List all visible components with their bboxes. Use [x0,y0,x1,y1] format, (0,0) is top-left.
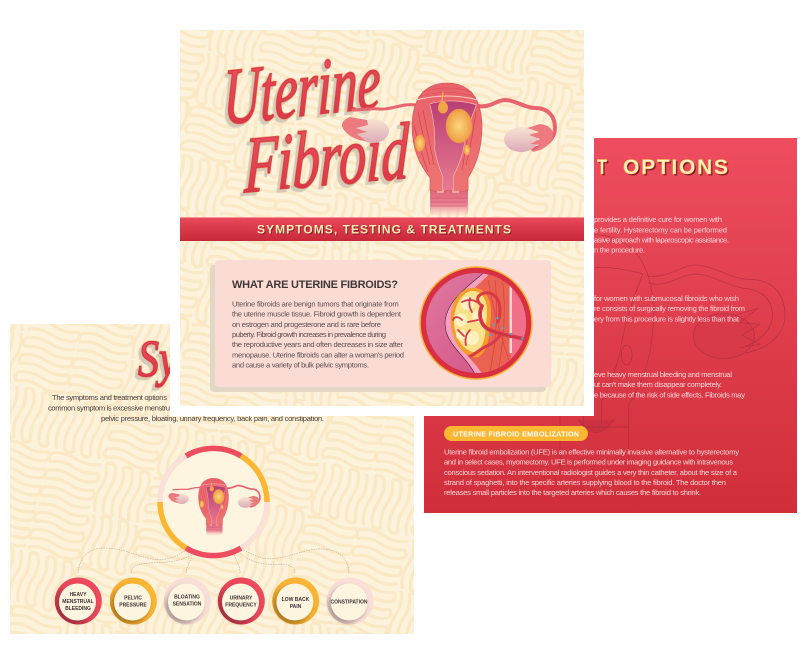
text block: medication: ut can't make them disappear completely. [594,380,722,389]
symptom: pelvic pressure [110,578,157,624]
panel: treatment options [424,138,797,513]
text block: definition: menopause. Uterine fibroids can alter a woman's period [232,350,404,360]
text block: definition: puberty. Fibroid growth increases in prevalence during [232,330,386,339]
heading: options: T [597,156,607,179]
symptom: urinary frequency [218,578,265,624]
symptom: constipation: CONSTIPATION [330,599,368,605]
central circle with uterus [160,448,267,556]
symptom: pelvic pressure: PELVIC [124,596,142,602]
text block: hysterectomy [594,215,729,254]
text block: myomectomy: for women with submucosal fibroids who wish [594,294,739,303]
heading: what are uterine fibroids: WHAT ARE UTERINE FIBROIDS? [232,279,398,291]
text block: definition: the reproductive years and often decreases in size after [232,340,403,349]
symptom: heavy menstrual bleeding [55,578,102,624]
dashed connectors [78,548,349,573]
symptom: bloating sensation: SENSATION [173,602,202,608]
title: uterine fibroid: Uterine [223,37,381,142]
text block: embolization: releases small particles into the targeted arteries which causes the fibroid to shrink. [444,488,701,497]
text block: embolization: and in select cases, myomectomy. UFE is performed under imaging guidance with intravenous [444,458,733,466]
text block: symptoms intro [48,393,324,423]
text block: definition: on estrogen and progesterone and is rare before [232,320,381,329]
text block: hysterectomy: asive approach with laparoscopic assistance. [594,236,729,244]
panel: what are uterine fibroids (main cover) [170,20,594,416]
symptom: low back pain [272,578,319,624]
symptom: heavy menstrual bleeding: BLEEDING [65,606,91,612]
symptom: urinary frequency: URINARY [230,596,253,602]
text block: hysterectomy: provides a definitive cure for women with [594,215,722,224]
text block: hysterectomy: n the procedure. [594,246,645,254]
text block: definition: Uterine fibroids are benign tumors that originate from [232,300,399,308]
text block: symptoms intro: common symptom is excessive menstru [48,404,170,412]
text block: embolization: conscious sedation. An interventional radiologist guides a very thin catheter, about the size of a [444,468,738,477]
text block: medication: eve heavy menstrual bleeding and menstrual [594,370,732,379]
illustration: uterus [342,83,555,217]
title: uterine fibroid [223,37,410,210]
text block: embolization: strand of spaghetti, into the specific arteries supplying blood to the fibroid. The doctor then [444,478,726,487]
heading: options: T [598,158,609,180]
heading: symptoms: Symptoms [138,331,308,388]
symptom: bloating sensation: BLOATING [174,594,200,600]
banner: symptoms, testing and treatments [180,217,584,241]
heading: options: OPTIONS [624,158,730,180]
icon: small uterus [168,478,260,536]
symptom: low back pain: PAIN [290,604,302,610]
symptom: heavy menstrual bleeding: HEAVY [70,592,87,598]
text block: definition: the uterine muscle tissue. Fibroid growth is dependent [232,310,402,319]
banner: symptoms, testing and treatments: SYMPTOMS, TESTING & TREATMENTS [257,222,511,236]
banner: symptoms, testing and treatments: SYMPTOMS, TESTING & TREATMENTS [258,224,512,238]
symptom: bloating sensation [164,578,211,624]
text block: embolization [444,448,739,497]
text block: symptoms intro: pelvic pressure, bloating, urinary frequency, back pain, and constipation. [101,414,324,423]
text block: myomectomy [594,294,745,324]
text block: definition: and cause a variety of bulk pelvic symptoms. [232,361,369,370]
symptom: constipation [326,578,374,624]
symptom: heavy menstrual bleeding: MENSTRUAL [62,599,94,605]
text block: hysterectomy: e fertility. Hysterectomy can be performed [594,225,727,234]
symptom: low back pain: LOW BACK [282,597,310,603]
text block: myomectomy: re consists of surgically removing the fibroid from [594,304,745,313]
text block: definition [232,300,404,370]
symptom: pelvic pressure: PRESSURE [119,602,147,608]
heading: options: OPTIONS [623,156,728,179]
card: definition [210,260,551,392]
text block: medication [594,370,745,400]
outline uterus watermark [528,234,785,470]
pill label: uterine fibroid embolization: UTERINE FIBROID EMBOLIZATION [453,429,579,438]
panel: symptoms [10,324,414,634]
symptom: urinary frequency: FREQUENCY [225,602,257,608]
text block: symptoms intro: The symptoms and treatment options [52,393,167,402]
title: uterine fibroid: Fibroid [243,107,410,210]
text block: embolization: Uterine fibroid embolization (UFE) is an effective minimally invasive alternative to hysterectomy [444,448,739,456]
text block: medication: e because of the risk of side effects. Fibroids may [594,390,745,400]
illustration: fibroid close-up [419,266,533,380]
pill label: uterine fibroid embolization [444,426,588,441]
text block: myomectomy: ery from this procedure is slightly less than that [594,314,740,324]
